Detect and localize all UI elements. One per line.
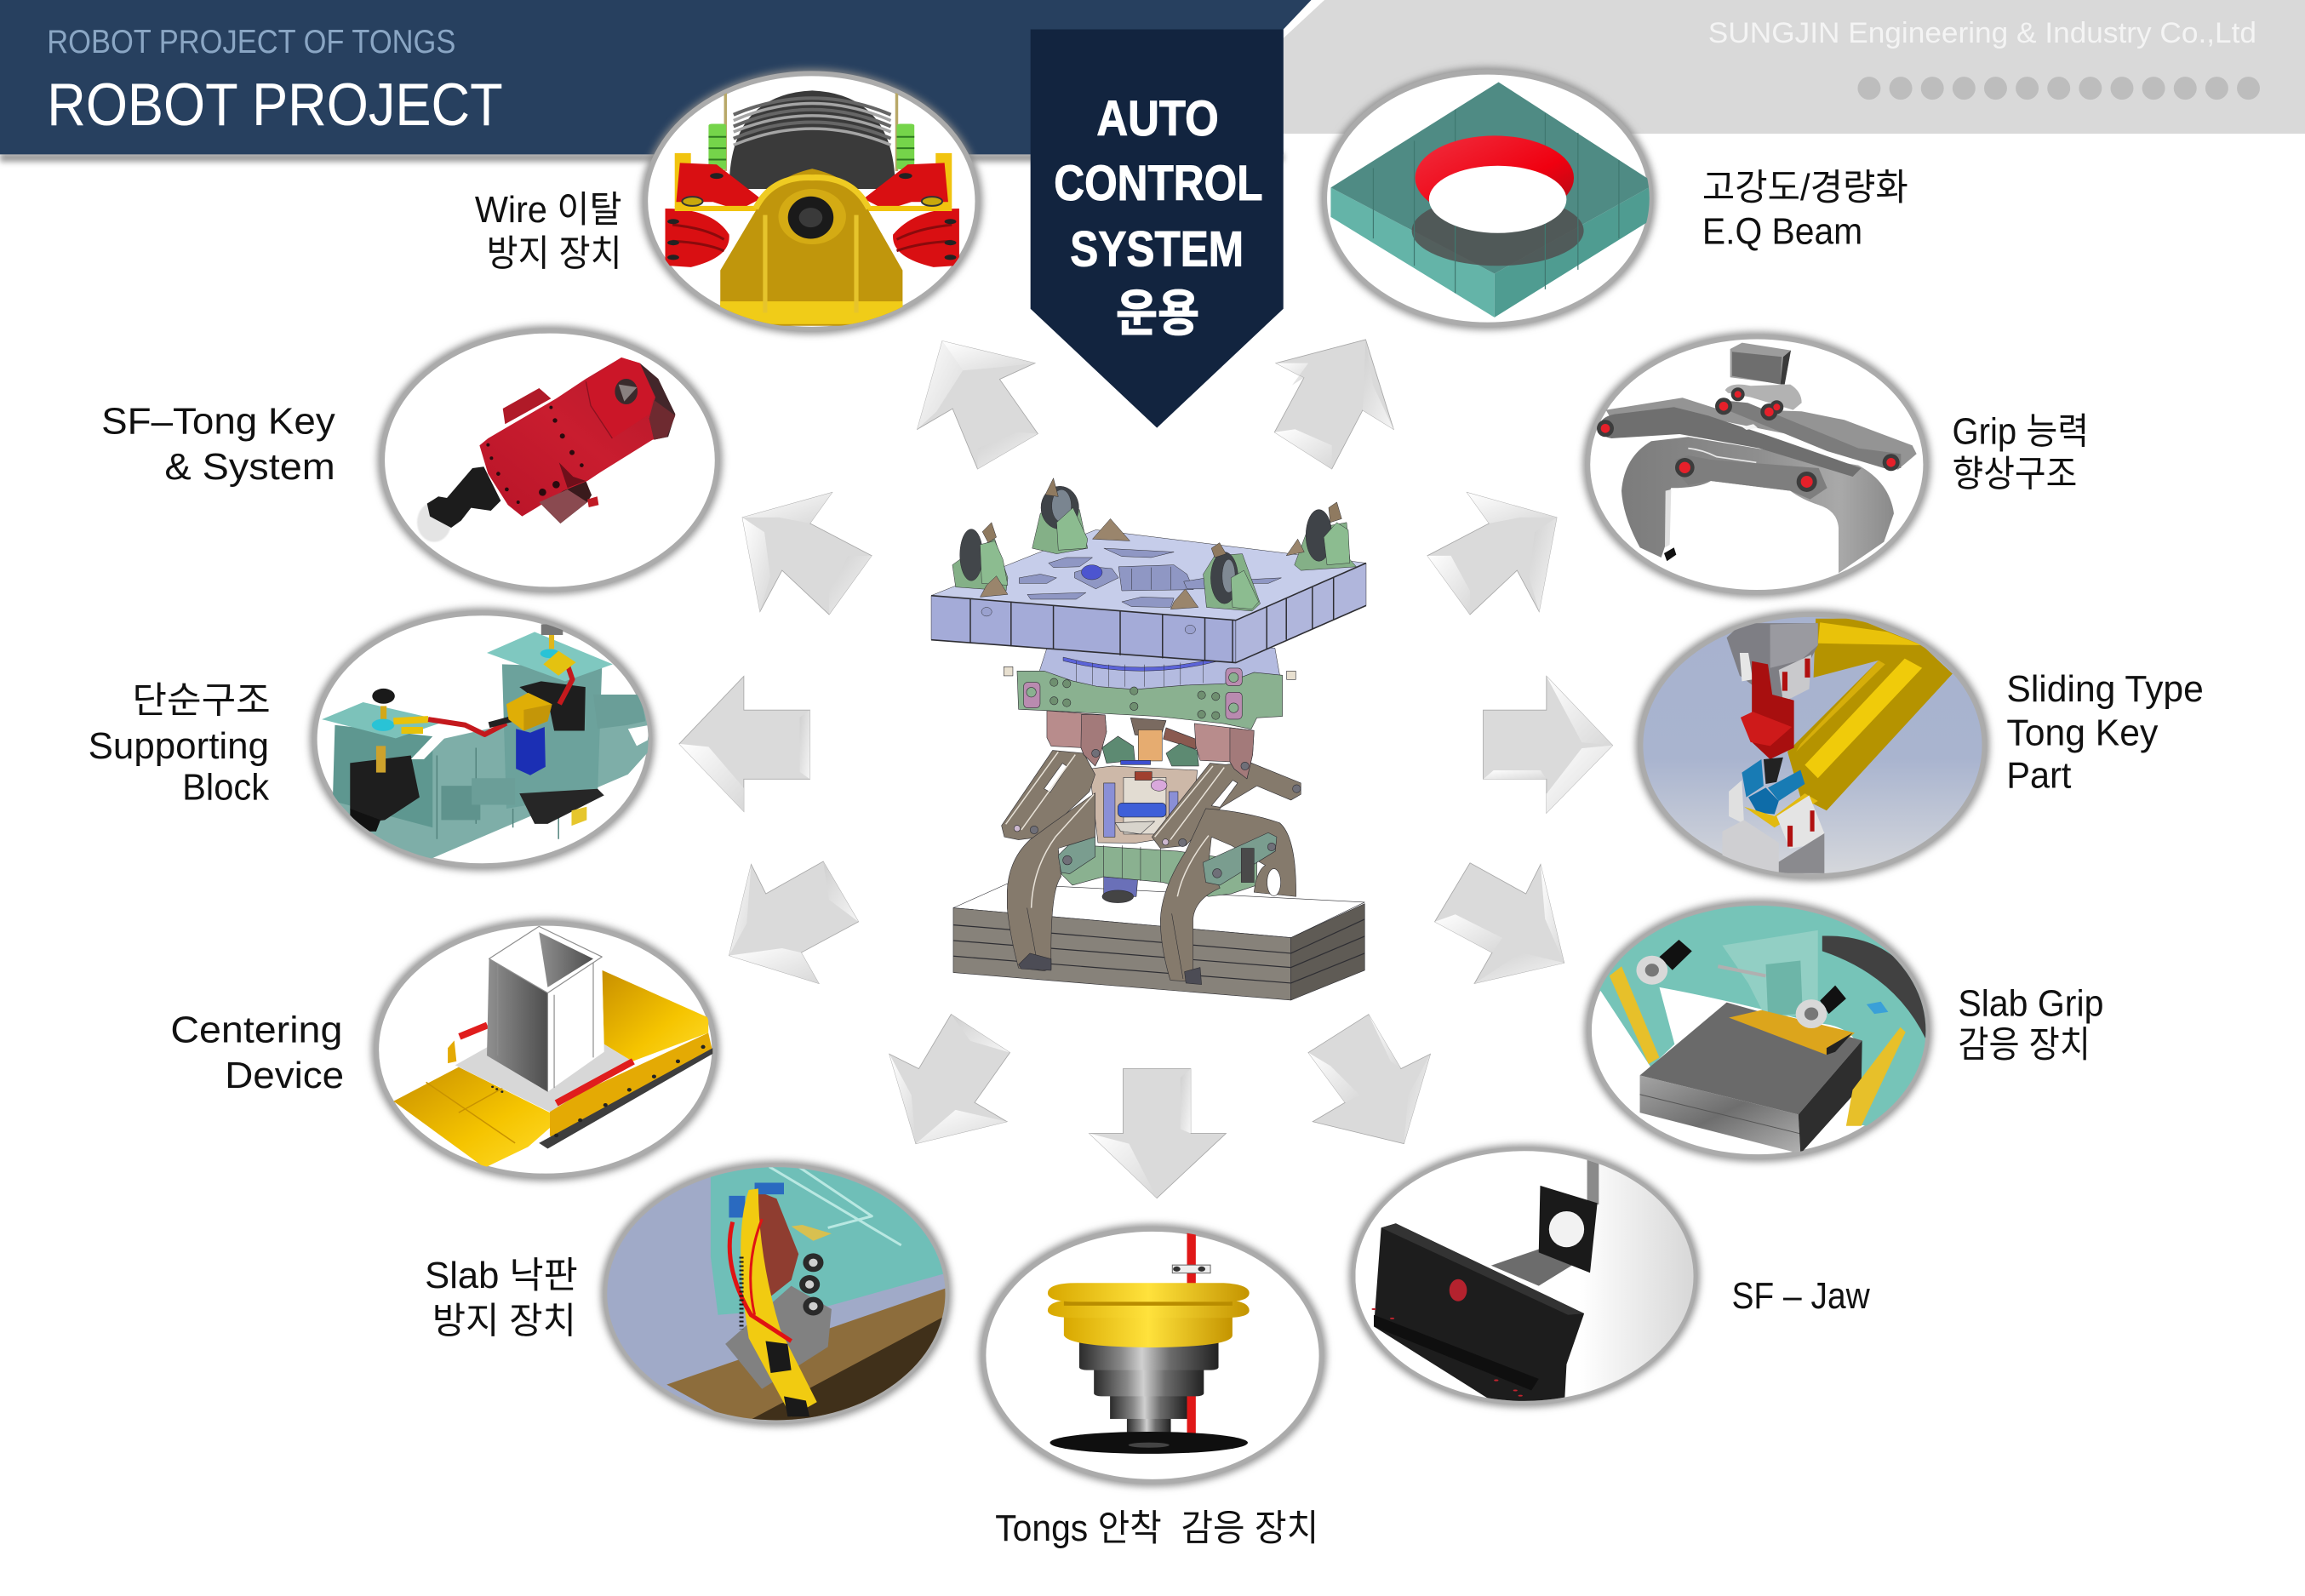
- joint pins: [1014, 749, 1301, 878]
- central tongs machine: [931, 478, 1366, 1000]
- label: tongs seating sensor: Tongs 안착 감응 장치: [995, 1508, 1318, 1549]
- pentagon banner: auto control system: 운용: [1116, 287, 1199, 342]
- label: supporting block: Block: [182, 768, 269, 809]
- green crossbeam: [1004, 666, 1295, 729]
- arrow: up-right top: [1274, 340, 1393, 469]
- label: wire: 방지 장치: [487, 234, 622, 275]
- pentagon banner: auto control system: CONTROL: [1054, 156, 1263, 211]
- tong upper links: [1002, 751, 1301, 849]
- arrow: up-left top: [918, 341, 1038, 469]
- label: EQ beam: 고강도/경량화: [1702, 168, 1908, 209]
- tong legs: [1007, 793, 1296, 985]
- panel: centering device: [376, 924, 714, 1176]
- label: grip: Grip 능력: [1953, 412, 2089, 453]
- arrow: lower-right: [1435, 863, 1564, 983]
- panel: slab grip sensor: [1583, 896, 1935, 1157]
- panel: SF jaw: [1354, 1149, 1700, 1410]
- image: slab grip: [1599, 906, 1925, 1152]
- lower mechanism: beam, hangers, arms: [1002, 666, 1301, 985]
- wheel unit: left: [952, 523, 1008, 597]
- header: grey band right: [1284, 0, 2305, 134]
- image: seating sensor: [1048, 1227, 1250, 1454]
- image: EQ beam: [1330, 82, 1656, 317]
- arrow: down: [1090, 1069, 1226, 1198]
- label: EQ beam: [1702, 168, 1908, 253]
- label: SF-Tong Key: & System: [164, 447, 335, 488]
- panel: simple structure supporting block: [315, 613, 652, 866]
- arrow: upper-left: [742, 493, 872, 615]
- label: slab grip: [1958, 983, 2103, 1066]
- image: grip arms: [1597, 343, 1917, 573]
- pentagon banner: auto control system: SYSTEM: [1070, 222, 1244, 277]
- label: EQ beam: E.Q Beam: [1702, 212, 1862, 253]
- wheel unit: front: [1170, 543, 1261, 611]
- panel: SF tong key: [382, 331, 718, 590]
- label: slab drop prevention: [425, 1256, 578, 1341]
- panel: grip improvement structure: [1587, 337, 1925, 592]
- label: wire: Wire 이탈: [475, 190, 622, 231]
- arrow: lower-left: [729, 861, 859, 983]
- label: centering device: Centering: [170, 1010, 342, 1050]
- arrow: left: [679, 676, 810, 811]
- image: supporting block: [322, 624, 652, 860]
- image: sliding tong key: [1722, 619, 1953, 873]
- pink hangers: [1047, 711, 1254, 779]
- label: centering device: [170, 1010, 344, 1096]
- label: sliding type tong key: Sliding Type: [2006, 669, 2204, 710]
- label: slab drop prevention: Slab 낙판: [425, 1256, 578, 1296]
- label: sliding type tong key: Tong Key: [2006, 713, 2159, 754]
- header: navy band left: [0, 0, 1312, 162]
- label: SF-Tong Key: SF–Tong Key: [101, 401, 335, 442]
- arrow: bottom-left: [889, 1015, 1010, 1144]
- title: ROBOT PROJECT: [47, 72, 503, 139]
- subtitle: ROBOT PROJECT OF TONGS: [47, 24, 455, 60]
- company name: SUNGJIN Engineering & Industry Co.,Ltd: [1708, 17, 2256, 49]
- image: red tong key: [417, 358, 675, 542]
- wheel unit: back: [1032, 478, 1130, 554]
- panel: tongs seating sensor: [983, 1227, 1322, 1482]
- image: wire device: [665, 90, 959, 326]
- label: slab grip: 감응 장치: [1958, 1025, 2091, 1066]
- image: black jaw: [1356, 1149, 1700, 1410]
- label: sliding type tong key: Part: [2006, 756, 2071, 797]
- lower green beam and cylinder: [1061, 845, 1257, 903]
- label: SF-Tong Key: [101, 401, 335, 488]
- decorative dot row: [1857, 77, 2260, 100]
- pentagon banner: auto control system: [1031, 30, 1284, 428]
- label: sliding type tong key: [2006, 669, 2204, 797]
- panel: sliding type tong key: [1640, 615, 1985, 876]
- arrow: upper-right: [1427, 493, 1557, 615]
- wheel unit: right: [1286, 502, 1356, 570]
- label: supporting block: 단순구조: [132, 681, 271, 722]
- image: slab drop prevention device: [601, 1158, 952, 1425]
- label: supporting block: Supporting: [89, 726, 269, 767]
- arrow: bottom-right: [1308, 1015, 1430, 1144]
- label: centering device: Device: [225, 1055, 344, 1096]
- label: supporting block: [89, 681, 271, 809]
- label: wire: [475, 190, 622, 275]
- label: grip: 향상구조: [1953, 455, 2077, 495]
- panel: wire derailment prevention device: [645, 73, 977, 329]
- label: slab drop prevention: 방지 장치: [432, 1301, 576, 1341]
- panel: slab drop prevention: [601, 1158, 952, 1425]
- label: grip: [1953, 412, 2089, 495]
- label: SF jaw: SF – Jaw: [1731, 1276, 1871, 1317]
- center gearbox: [1090, 718, 1198, 844]
- upper frame with wheels: [931, 478, 1366, 696]
- label: slab grip: Slab Grip: [1958, 983, 2103, 1024]
- image: centering device: [393, 926, 712, 1168]
- pentagon banner: auto control system: AUTO: [1096, 91, 1219, 146]
- panel: high strength EQ beam: [1324, 72, 1656, 325]
- slab stack: [953, 884, 1364, 1000]
- arrow: right: [1484, 676, 1613, 813]
